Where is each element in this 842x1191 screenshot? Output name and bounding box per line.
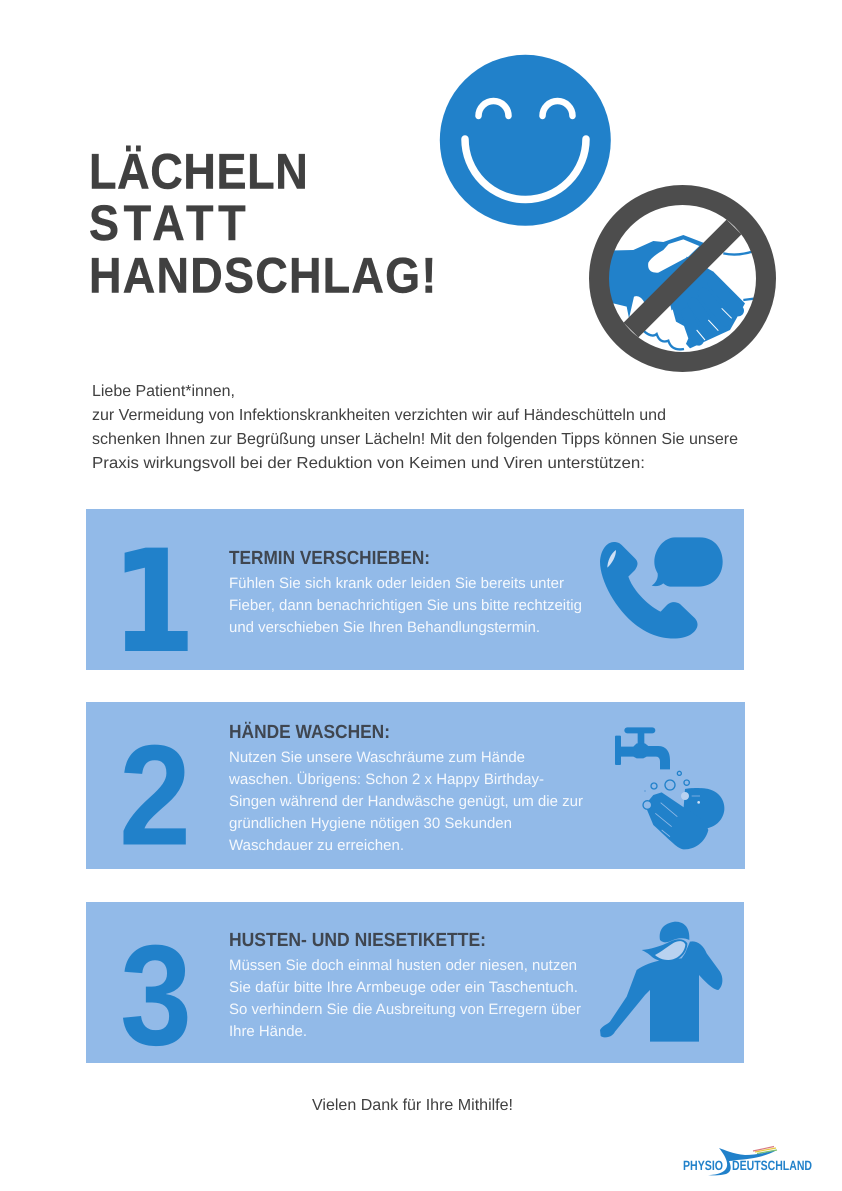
text 3: So verhindern Sie die Ausbreitung von Erregern über [229,1001,581,1018]
panel 2: Hände waschen [86,702,745,876]
text 2: Nutzen Sie unsere Waschräume zum Hände [229,749,525,766]
number 3: 3 [120,916,192,1076]
icon: phone and speech bubble [600,537,723,639]
title: STATT [89,195,246,251]
text 1: Fühlen Sie sich krank oder leiden Sie bereits unter [229,575,564,592]
icon: smiley [440,55,611,226]
intro text: Liebe Patient*innen, [92,383,235,400]
text 2: waschen. Übrigens: Schon 2 x Happy Birthday- [228,771,544,788]
icon: crossed out handshake [599,195,766,362]
text 2: Waschdauer zu erreichen. [229,837,404,854]
text 1 [229,575,582,636]
intro text [92,383,738,472]
text 3: Müssen Sie doch einmal husten oder niesen, nutzen [229,957,577,974]
text 1: Fieber, dann benachrichtigen Sie uns bitte rechtzeitig [229,597,582,614]
text 2: Singen während der Handwäsche genügt, um die zur [229,793,583,810]
panel 3: Husten- und Niesetikette [86,902,744,1076]
text 2 [228,749,583,854]
intro text: zur Vermeidung von Infektionskrankheiten verzichten wir auf Händeschütteln und [92,407,666,424]
panel 1: Termin verschieben [86,509,744,683]
text 2: gründlichen Hygiene nötigen 30 Sekunden [229,815,512,832]
intro text: schenken Ihnen zur Begrüßung unser Lächeln! Mit den folgenden Tipps können Sie unsere [92,431,738,448]
logo: Physio Deutschland [683,1146,812,1175]
heading 1: TERMIN VERSCHIEBEN: [229,548,430,569]
icon: person sneezing into elbow [600,922,722,1042]
logo: Physio Deutschland: DEUTSCHLAND [732,1158,812,1173]
heading 2: HÄNDE WASCHEN: [229,721,390,743]
heading 3: HUSTEN- UND NIESETIKETTE: [229,930,486,951]
title: LÄCHELN [89,144,308,200]
icon: faucet and washing hands [615,727,724,849]
title [89,144,436,304]
text 1: und verschieben Sie Ihren Behandlungstermin. [229,619,540,636]
number 1: 1 [112,521,195,683]
number 2: 2 [119,716,191,876]
closing text: Vielen Dank für Ihre Mithilfe! [312,1097,513,1114]
logo: Physio Deutschland: PHYSIO [683,1158,723,1173]
text 3 [229,957,581,1040]
intro text: Praxis wirkungsvoll bei der Reduktion von Keimen und Viren unterstützen: [92,455,645,472]
text 3: Sie dafür bitte Ihre Armbeuge oder ein Taschentuch. [229,979,578,996]
text 3: Ihre Hände. [229,1023,307,1040]
title: HANDSCHLAG! [89,248,436,304]
